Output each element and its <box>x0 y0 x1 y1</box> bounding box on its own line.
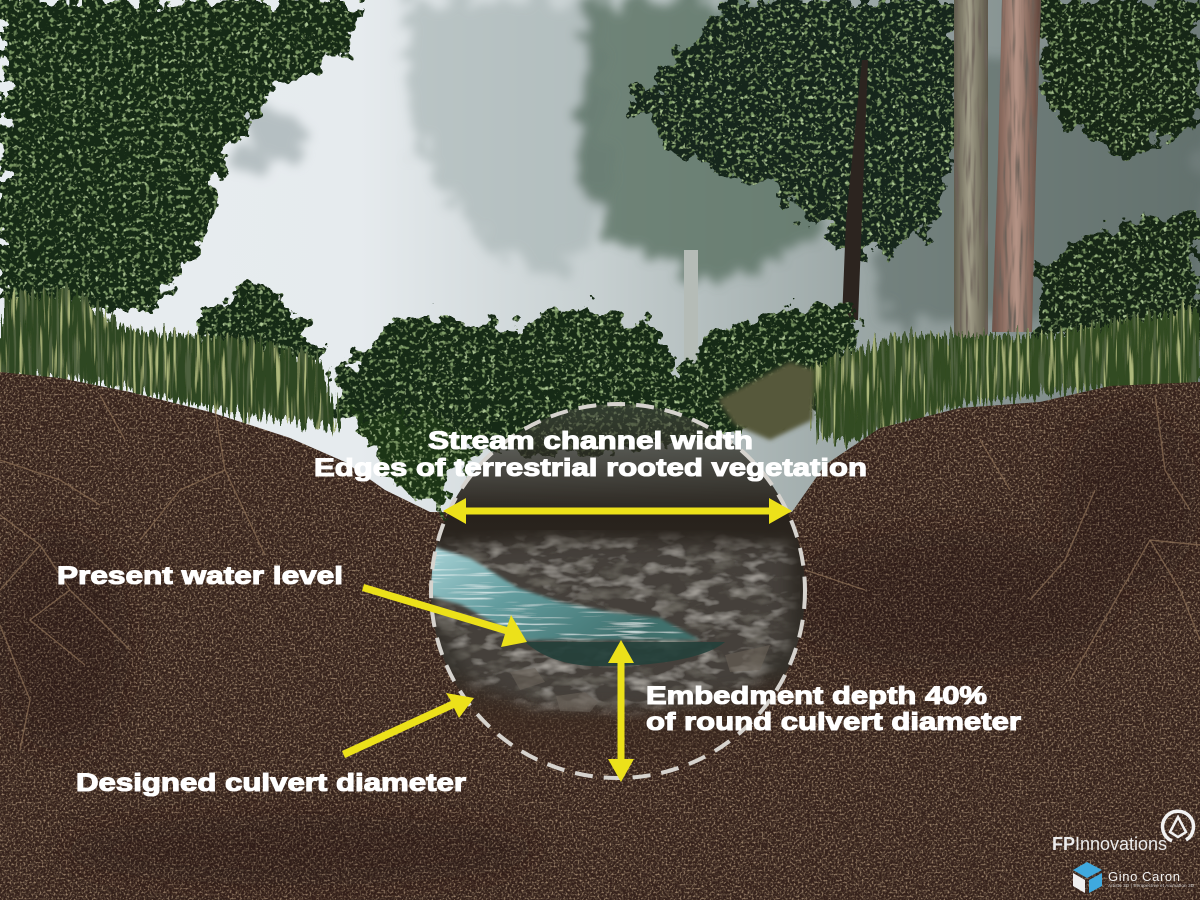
logo name: Gino Caron <box>1108 869 1180 884</box>
dark soil shading <box>0 410 1200 885</box>
left grass bank <box>0 290 345 430</box>
arrow: present water level <box>362 584 527 647</box>
logo wordmark: FPInnovations <box>1052 834 1167 854</box>
misty tree trunk <box>684 250 698 365</box>
logo mark: ring with leaf <box>1163 811 1194 841</box>
left foreground tree canopy <box>0 0 365 310</box>
birch-like trunk left <box>954 0 988 346</box>
label: stream channel width: Stream channel width <box>428 427 753 455</box>
culvert glass top and dark interior <box>431 404 805 778</box>
tall pine: dark canopy <box>630 0 960 320</box>
foliage hanging over the left edge of the culvert <box>350 410 480 515</box>
logo: Gino Caron <box>1073 862 1195 893</box>
logo tagline: Artiste 3D | Perspective et Animation 3D <box>1108 883 1195 888</box>
arrow: embedment depth <box>608 640 634 782</box>
bushes along the stream <box>195 285 860 450</box>
arrow: designed culvert diameter <box>342 693 474 758</box>
misty sky background <box>0 0 1200 520</box>
right canopy <box>1035 0 1200 340</box>
rocky stream bank <box>425 530 800 720</box>
label: embedment depth: Embedment depth 40% <box>646 682 987 710</box>
soil cross-section <box>0 372 1200 900</box>
misty background trees <box>235 0 1200 320</box>
reddish pine trunk right <box>992 0 1041 332</box>
fallen mossy log <box>718 362 815 440</box>
embedded stones <box>510 645 770 712</box>
label: edges of vegetation: Edges of terrestrial rooted vegetation <box>314 454 867 482</box>
label: round culvert diameter: of round culvert diameter <box>646 708 1021 736</box>
tree roots in the soil <box>0 395 1200 750</box>
submerged water lens <box>525 642 725 666</box>
right grass bank <box>810 305 1200 440</box>
logo mark: 3D cube <box>1073 862 1102 893</box>
arrow: stream channel width <box>443 498 792 524</box>
culvert outline: dashed circle <box>431 404 805 778</box>
label: present water level: Present water level <box>57 562 343 590</box>
culvert interior view <box>425 404 805 778</box>
label: designed culvert diameter: Designed culvert diameter <box>76 769 466 797</box>
logo: FPInnovations <box>1052 811 1194 854</box>
stream water surface <box>430 546 700 640</box>
